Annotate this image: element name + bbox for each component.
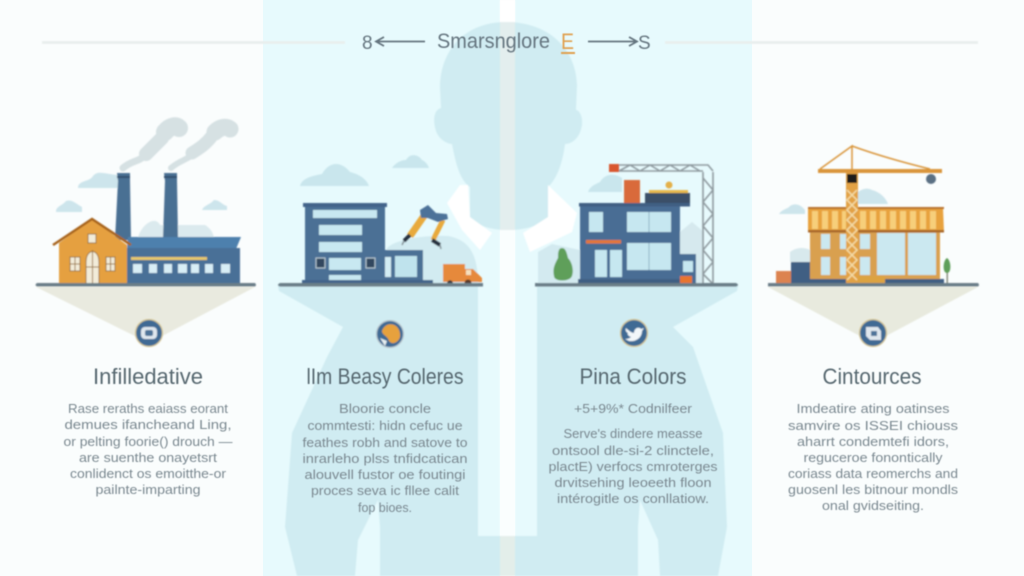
text block: construction description: reguceroe fonontically: [804, 450, 943, 465]
text block: office description: feathes robh and satove to: [302, 435, 468, 450]
text block: building description: Serve's dindere measse: [564, 426, 702, 441]
office illustration: [278, 155, 483, 286]
text block: factory description: Rase reraths eaiass eorant: [68, 401, 228, 416]
text block: office description: fop bioes.: [358, 500, 412, 515]
text block: office description: Bloorie concle: [339, 401, 431, 416]
title: Smarsnglore: [437, 30, 550, 53]
right arrow: [588, 33, 651, 54]
text block: building description: intérogitle os conllatiow.: [557, 491, 709, 506]
text block: office description: inrarleho plss tnfidcatican: [302, 451, 468, 466]
text block: building description: [548, 426, 718, 506]
text block: building description: plactE) verfocs cmroterges: [548, 459, 718, 474]
text block: office description: proces seva ic fllee calit: [311, 483, 459, 498]
panel: building with crane: [535, 164, 738, 506]
heading: Cintources: Cintources: [822, 364, 922, 389]
right arrow: S: [638, 33, 651, 54]
icon: badge: [136, 320, 162, 346]
text block: factory description: are suenthe onayetsrt: [79, 450, 217, 465]
text block: factory description: pailnte-imparting: [96, 482, 200, 497]
icon: twitter bird: [620, 320, 648, 346]
panel: factory: [36, 126, 256, 497]
construction illustration: [768, 146, 979, 343]
silhouette of a person: [278, 0, 738, 576]
text block: office description: [302, 401, 468, 515]
text block: construction description: samvire os ISSEI chiouss: [788, 418, 959, 433]
panel: construction: [768, 146, 979, 513]
text block: factory description: demues ifancheand Ling,: [64, 417, 232, 432]
text block: office description: commtesti: hidn cefuc ue: [308, 418, 462, 433]
title: E: [561, 29, 574, 54]
text block: factory description: or pelting foorie() drouch —: [64, 434, 232, 449]
panel: office with robot arm: [278, 155, 483, 515]
text block: construction description: guosenl les bitnour mondls: [788, 482, 959, 497]
subheading: +5+9%* Codnilfeer: [574, 401, 693, 416]
header rules: [42, 41, 978, 44]
building illustration: [535, 164, 738, 286]
text block: construction description: aharrt condemtefi idors,: [797, 434, 949, 449]
text block: factory description: [64, 401, 232, 497]
heading: Im Beasy Coleres: lIm Beasy Coleres: [306, 364, 464, 389]
text block: construction description: Imdeatire ating oatinses: [796, 401, 950, 416]
text block: factory description: conlidenct os emoitthe-or: [70, 466, 227, 481]
text block: building description: drvitsehing leoeeth floon: [554, 475, 712, 490]
text block: construction description: onal gvidseiting.: [822, 498, 924, 513]
text block: office description: alouvell fustor oe foutingi: [304, 467, 466, 482]
icon: document badge: [860, 320, 886, 346]
text block: construction description: [788, 401, 959, 513]
left arrow: [362, 33, 425, 54]
icon: globe: [376, 320, 404, 348]
text block: construction description: coriass data reomerchs and: [788, 466, 958, 481]
factory illustration: [36, 126, 256, 343]
left arrow: 8: [362, 33, 373, 54]
text block: building description: ontsool dle-si-2 clinctele,: [552, 443, 714, 458]
heading: Infilledative: Infilledative: [93, 364, 203, 389]
heading: Pina Colors: Pina Colors: [580, 364, 686, 389]
